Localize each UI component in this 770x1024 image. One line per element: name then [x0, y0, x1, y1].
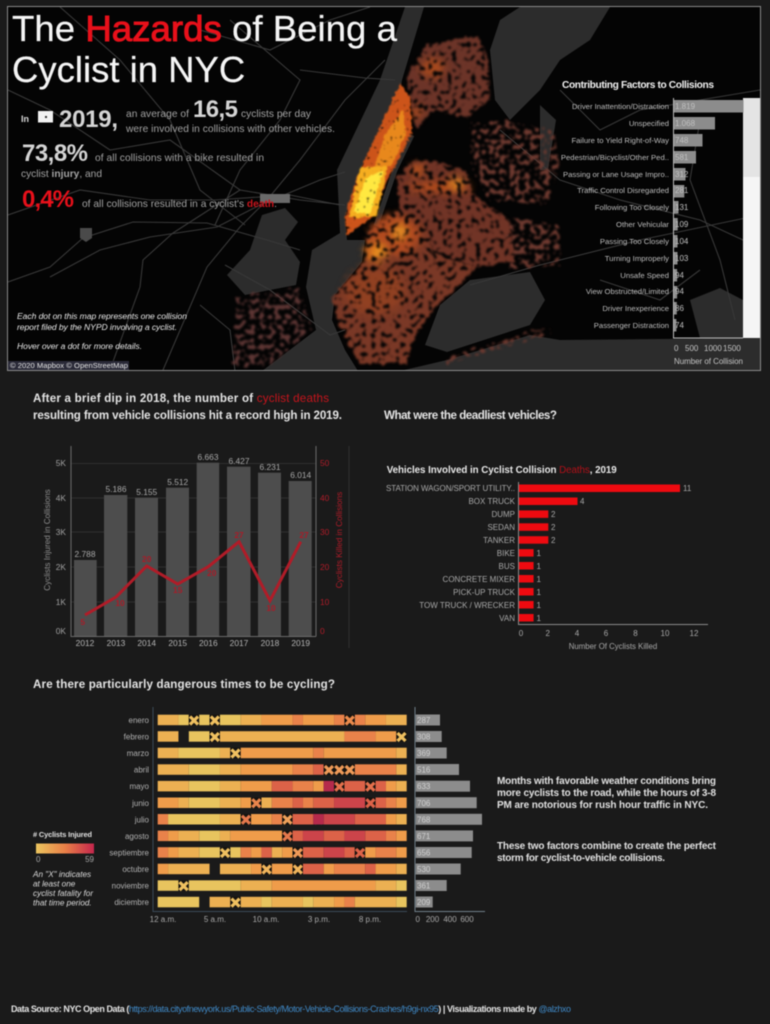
- title: [12, 8, 398, 90]
- vehicle values: 1: [536, 601, 542, 610]
- vehicle axis: 12: [690, 629, 699, 638]
- vehicle labels: BUS: [499, 562, 515, 571]
- factor values: 581: [675, 153, 689, 162]
- factor labels: [561, 102, 669, 330]
- factor axis: [674, 344, 743, 366]
- bar value labels: [75, 452, 312, 559]
- stats text block: 16,5: [193, 96, 238, 123]
- deaths labels: 20: [207, 568, 217, 578]
- deaths labels: 27: [299, 530, 309, 540]
- factor values: 94: [675, 287, 684, 296]
- vehicle values: 2: [551, 536, 556, 545]
- left axis: 5K: [56, 458, 66, 468]
- stats text block: cyclists per day: [241, 109, 312, 120]
- factor values: 1.819: [675, 102, 696, 111]
- factors title: Contributing Factors to Collisions: [562, 80, 714, 91]
- vehicle values: 1: [536, 549, 542, 558]
- legend: cyclists injured: An "X" indicates: [32, 870, 91, 879]
- map: collision dots: [233, 35, 562, 367]
- factor values: 86: [675, 304, 684, 313]
- factor labels: Passenger Distraction: [594, 321, 669, 330]
- left axis: 0K: [56, 626, 66, 636]
- callout: weather and rush hour: PM are notorious for rush hour traffic in NYC.: [497, 800, 708, 811]
- factor axis: 1500: [723, 344, 741, 353]
- bar value labels: 5.512: [167, 477, 189, 487]
- left axis: Cyclists Injured in Collisions: [43, 489, 52, 591]
- year axis: 2014: [137, 638, 156, 648]
- total axis: 200: [426, 915, 440, 924]
- total values: 209: [417, 898, 431, 907]
- month labels: enero: [129, 716, 150, 725]
- vehicle values: 2: [551, 523, 556, 532]
- bar value labels: 5.186: [106, 484, 127, 494]
- factor labels: Unspecified: [629, 119, 669, 128]
- factor labels: Traffic Control Disregarded: [577, 186, 669, 195]
- deaths labels: [80, 530, 309, 627]
- stats text block: of all collisions with a bike resulted in: [95, 153, 264, 164]
- hour axis: 8 p.m.: [359, 915, 381, 924]
- hour axis: 12 a.m.: [150, 915, 176, 924]
- deaths line: [85, 542, 301, 615]
- left axis: 2K: [56, 562, 66, 572]
- year axis: 2016: [199, 638, 218, 648]
- legend: cyclists injured: 0: [36, 855, 41, 864]
- title: Cyclist in NYC: [12, 49, 245, 90]
- month labels: noviembre: [112, 882, 150, 890]
- legend: cyclists injured: cyclist fatality for: [33, 889, 93, 898]
- factor labels: Following Too Closely: [595, 203, 669, 212]
- right axis: Cyclists Killed in Collisions: [335, 492, 344, 588]
- year axis: 2012: [76, 638, 95, 648]
- stats text block: of all collisions resulted in a cyclist's death.: [82, 199, 277, 210]
- vehicle labels: SEDAN: [487, 523, 515, 532]
- vehicle values: 11: [683, 484, 692, 493]
- factor bars: [674, 100, 744, 332]
- factor values: 281: [675, 186, 689, 195]
- legend: cyclists injured: at least one: [33, 880, 76, 888]
- map attribution: © 2020 Mapbox © OpenStreetMap: [10, 361, 128, 370]
- callout: weather and rush hour: Months with favorable weather conditions bring: [497, 776, 716, 787]
- right axis: 10: [320, 597, 330, 607]
- vehicle labels: TANKER: [483, 536, 515, 545]
- year axis: 2018: [261, 638, 280, 648]
- left axis: 4K: [56, 493, 66, 503]
- stats text block: [21, 96, 335, 213]
- month labels: mayo: [129, 782, 150, 791]
- month labels: abril: [134, 766, 149, 774]
- factor values: 312: [675, 170, 689, 179]
- vehicle axis: 6: [604, 629, 609, 638]
- vehicles title: Vehicles Involved in Cyclist Collision Deaths, 2019: [387, 465, 617, 476]
- panel: collision map: [8, 6, 760, 371]
- vehicle labels: PICK-UP TRUCK: [453, 588, 516, 597]
- total axis: 600: [460, 915, 474, 924]
- vehicle values: 4: [580, 497, 585, 506]
- total values: 768: [417, 816, 431, 824]
- legend: cyclists injured: 59: [85, 855, 95, 864]
- vehicle axis: 10: [661, 629, 670, 638]
- month labels: julio: [134, 816, 150, 824]
- factor labels: Failure to Yield Right-of-Way: [571, 136, 669, 145]
- total values: 287: [417, 716, 431, 725]
- callout: weather and rush hour: These two factors combine to create the perfect: [497, 841, 717, 852]
- right axis: 50: [320, 458, 330, 468]
- vehicle axis: 8: [633, 629, 638, 638]
- total values: 530: [417, 865, 431, 874]
- year axis: 2013: [107, 638, 126, 648]
- vehicle axis: [519, 629, 699, 651]
- factor labels: Turning Improperly: [605, 254, 669, 263]
- bar value labels: 5.155: [136, 487, 158, 497]
- chart: monthly totals: [415, 707, 485, 924]
- month labels: diciembre: [114, 898, 150, 907]
- deaths labels: 20: [142, 554, 152, 564]
- hour axis: [150, 915, 381, 924]
- factor values: 103: [675, 254, 689, 263]
- stats text block: an average of: [126, 109, 189, 120]
- bar value labels: 6.014: [290, 470, 312, 480]
- map note: Hover over a dot for more details.: [17, 341, 142, 351]
- heading: cyclist deaths: resulting from vehicle collisions hit a record high in 2019.: [33, 409, 342, 422]
- vehicle axis: 0: [519, 629, 524, 638]
- factor labels: Driver Inexperience: [602, 304, 669, 313]
- callout: weather and rush hour: storm for cyclist-to-vehicle collisions.: [497, 853, 665, 864]
- total values: 671: [417, 832, 431, 841]
- total values: 516: [417, 766, 431, 774]
- total values: 369: [417, 749, 431, 758]
- total values: 361: [417, 882, 431, 890]
- month labels: agosto: [125, 832, 150, 841]
- factor axis: 0: [674, 344, 679, 353]
- vehicle labels: STATION WAGON/SPORT UTILITY..: [386, 484, 515, 493]
- total values: 706: [417, 799, 431, 808]
- map note: [17, 311, 187, 351]
- callout: weather and rush hour: more cyclists to the road, while the hours of 3-8: [497, 788, 716, 799]
- chart: month by hour heatmap: [109, 707, 407, 924]
- yearly bars: [74, 463, 312, 636]
- factor labels: Unsafe Speed: [620, 271, 669, 280]
- vehicle labels: DUMP: [491, 510, 515, 519]
- right axis: 30: [320, 527, 330, 537]
- legend: cyclists injured: that time period.: [33, 898, 92, 908]
- heatmap cells: [158, 715, 407, 907]
- vehicle values: [536, 484, 692, 623]
- year axis: 2017: [230, 638, 249, 648]
- factor labels: View Obstructed/Limited: [586, 287, 669, 296]
- white scroll panel: [743, 98, 760, 338]
- deaths labels: 5: [80, 617, 85, 627]
- bar value labels: 6.663: [198, 452, 219, 462]
- vehicle axis: Number Of Cyclists Killed: [569, 642, 657, 651]
- footer: data source: Data Source: NYC Open Data (https://data.cityofnewyork.us/Public-Safety/Motor-Vehicle-Collisions-Crashes/h9gi-nx95) | Visualizations made by @alzhxo: [11, 1004, 571, 1014]
- hour axis: 3 p.m.: [308, 915, 330, 924]
- month labels: febrero: [124, 732, 150, 742]
- vehicle labels: BIKE: [497, 549, 515, 558]
- stats text block: were involved in collisions with other vehicles.: [125, 124, 335, 135]
- vehicle labels: VAN: [499, 614, 515, 623]
- stats text block: cyclist injury, and: [21, 169, 102, 180]
- total axis: 0: [415, 915, 420, 924]
- vehicle values: 2: [551, 510, 556, 519]
- month labels: junio: [131, 799, 150, 808]
- bar value labels: 6.427: [229, 456, 250, 466]
- right axis: 20: [320, 562, 330, 572]
- right axis: 40: [320, 493, 330, 503]
- year axis: [76, 638, 310, 648]
- factor values: 109: [675, 220, 689, 229]
- stats text block: 2019,: [59, 106, 118, 133]
- vehicle labels: CONCRETE MIXER: [443, 575, 515, 584]
- heading: deadliest vehicles: What were the deadliest vehicles?: [384, 409, 557, 422]
- year axis: 2015: [168, 638, 187, 648]
- callout: weather and rush hour: [497, 776, 717, 864]
- factor labels: Passing or Lane Usage Impro..: [563, 170, 669, 179]
- dots: outer boroughs sparse: [233, 120, 562, 367]
- deaths labels: 10: [115, 598, 125, 608]
- chart: injuries and deaths by year: [43, 446, 349, 648]
- factor values: 74: [675, 321, 684, 330]
- right axis: [320, 458, 344, 636]
- factor values: [675, 102, 696, 330]
- factor labels: Pedestrian/Bicyclist/Other Ped..: [561, 153, 669, 162]
- heading: dangerous times: Are there particularly dangerous times to be cycling?: [33, 678, 335, 691]
- deaths labels: 27: [234, 530, 244, 540]
- factor values: 94: [675, 271, 684, 280]
- deaths labels: 15: [173, 585, 183, 595]
- vehicle labels: TOW TRUCK / WRECKER: [419, 601, 515, 610]
- factor values: 1.068: [675, 119, 696, 128]
- vehicle values: 1: [536, 588, 542, 597]
- vehicle labels: BOX TRUCK: [468, 497, 516, 506]
- total values: 308: [417, 732, 431, 742]
- vehicle axis: 4: [575, 629, 580, 638]
- map note: Each dot on this map represents one collision: [17, 311, 187, 321]
- chart: contributing factors: [561, 80, 744, 366]
- factor labels: Driver Inattention/Distraction: [572, 102, 669, 111]
- month labels: octubre: [122, 865, 150, 874]
- vehicle values: 1: [536, 562, 542, 571]
- month labels: septiembre: [109, 848, 150, 858]
- total axis: [415, 915, 474, 924]
- hour axis: 5 a.m.: [204, 915, 226, 924]
- dots: manhattan: [345, 83, 412, 235]
- bar value labels: 6.231: [260, 462, 281, 472]
- factor values: 104: [675, 237, 689, 246]
- heading: cyclist deaths: After a brief dip in 2018, the number of cyclist deaths: [33, 392, 329, 405]
- left axis: [43, 458, 66, 636]
- legend: cyclists injured: [32, 830, 95, 908]
- factor values: 748: [675, 136, 689, 145]
- heading: cyclist deaths: [33, 392, 342, 422]
- vehicle axis: 2: [545, 629, 550, 638]
- month labels: [109, 716, 150, 907]
- total bars: [416, 714, 482, 908]
- vehicle labels: [386, 484, 516, 623]
- factor axis: 500: [685, 344, 699, 353]
- total values: 633: [417, 782, 431, 791]
- dots: bronx queens brooklyn: [332, 35, 515, 364]
- month labels: marzo: [127, 749, 150, 758]
- factor axis: Number of Collision: [674, 357, 743, 366]
- stats text block: 73,8%: [22, 140, 88, 167]
- legend: cyclists injured: # Cyclists Injured: [33, 830, 92, 839]
- factor labels: Other Vehicular: [616, 220, 669, 229]
- right axis: 0: [320, 626, 325, 636]
- chart: vehicles involved in deaths: [386, 465, 708, 651]
- factor values: 131: [675, 203, 689, 212]
- vehicle bars: [519, 484, 680, 622]
- deaths labels: 10: [266, 603, 276, 613]
- stats text block: 0,4%: [22, 186, 74, 213]
- bar value labels: 2.788: [75, 549, 96, 559]
- vehicle values: 1: [536, 614, 542, 623]
- left axis: 1K: [56, 597, 66, 607]
- total axis: 400: [443, 915, 457, 924]
- hour axis: 10 a.m.: [253, 915, 279, 924]
- map: water and roads: [8, 7, 760, 371]
- left axis: 3K: [56, 527, 66, 537]
- vehicle values: 1: [536, 575, 542, 584]
- stats text block: In: [21, 114, 29, 124]
- total values: [417, 716, 431, 907]
- total values: 656: [417, 848, 431, 858]
- factor axis: 1000: [704, 344, 722, 353]
- title: The Hazards of Being a: [12, 8, 398, 49]
- map note: report filed by the NYPD involving a cyclist.: [17, 322, 177, 332]
- factor labels: Passing Too Closely: [600, 237, 669, 246]
- year axis: 2019: [291, 638, 310, 648]
